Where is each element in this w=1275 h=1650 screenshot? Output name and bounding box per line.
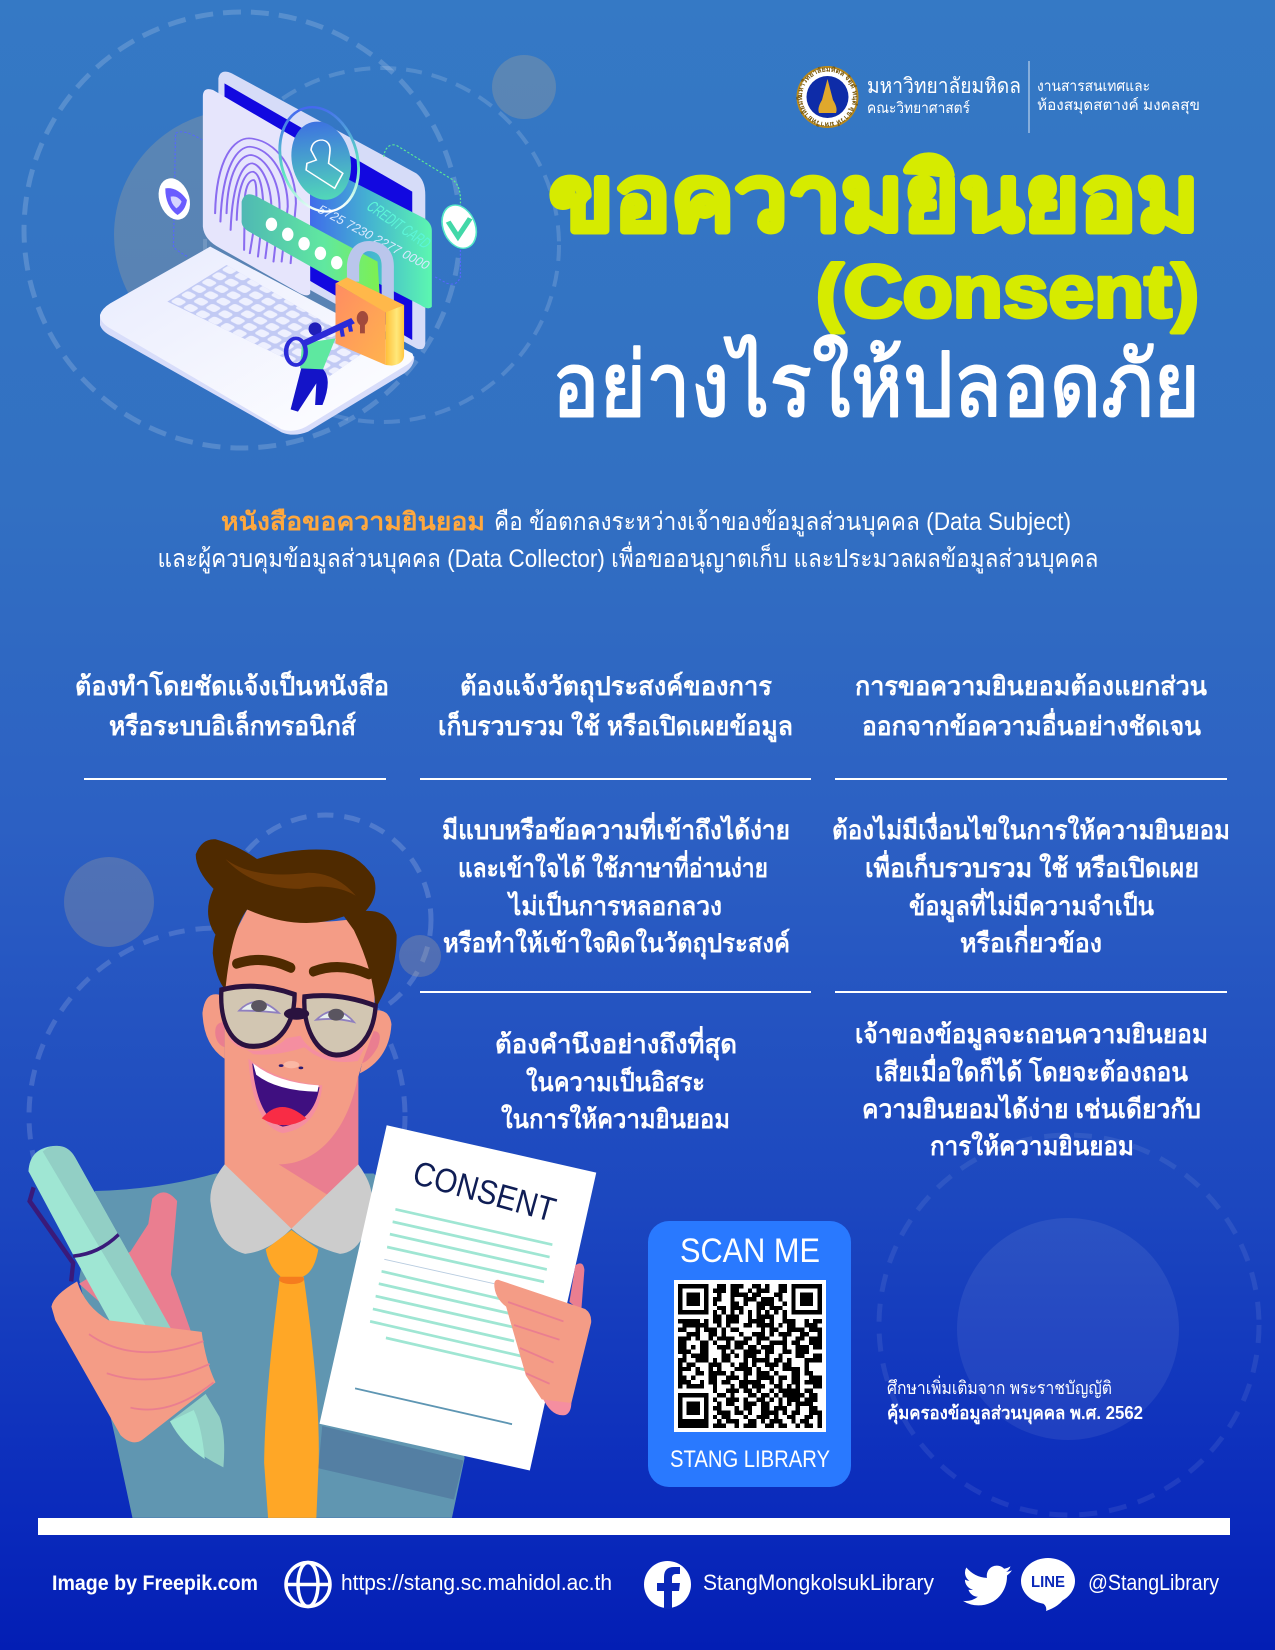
image credit: Image by Freepik.com bbox=[52, 1572, 258, 1595]
definition paragraph: หนังสือขอความยินยอม bbox=[221, 508, 485, 536]
item: freedom of consent: ต้องคำนึงอย่างถึงที่สุด bbox=[495, 1025, 737, 1061]
QR code bbox=[678, 1286, 822, 1426]
item: no unnecessary conditions bbox=[832, 811, 1230, 958]
faculty name: มหาวิทยาลัยมหิดล bbox=[867, 75, 1021, 98]
item: easy to access bbox=[442, 811, 790, 960]
item: state purpose: ต้องแจ้งวัตถุประสงค์ของการ bbox=[460, 671, 772, 703]
check badge bbox=[384, 145, 482, 284]
password bar bbox=[242, 194, 380, 293]
credit card: 5725 7230 2277 0000 bbox=[314, 203, 433, 272]
left thumb behind pen bbox=[79, 1192, 191, 1331]
item: freedom of consent: ในการให้ความยินยอม bbox=[501, 1104, 730, 1134]
laptop screen bbox=[218, 72, 425, 349]
item: withdrawal: เจ้าของข้อมูลจะถอนความยินยอม bbox=[855, 1019, 1208, 1051]
definition paragraph bbox=[158, 508, 1098, 574]
item: withdrawal: การให้ความยินยอม bbox=[930, 1131, 1134, 1161]
laptop base bbox=[100, 247, 414, 435]
item: withdrawal bbox=[855, 1019, 1208, 1161]
item: easy to access: ไม่เป็นการหลอกลวง bbox=[506, 890, 722, 921]
nose bbox=[279, 1061, 303, 1069]
item: written form bbox=[75, 670, 389, 741]
icon: line bbox=[1021, 1558, 1075, 1611]
definition paragraph: คือ ข้อตกลงระหว่างเจ้าของข้อมูลส่วนบุคคล (Data Subject) bbox=[494, 508, 1071, 537]
item: no unnecessary conditions: ต้องไม่มีเงื่อนไขในการให้ความยินยอม bbox=[832, 811, 1230, 845]
padlock bbox=[336, 246, 404, 366]
credit card bbox=[310, 160, 435, 308]
item: easy to access: มีแบบหรือข้อความที่เข้าถึงได้ง่าย bbox=[442, 811, 790, 845]
twitter and line handle: @StangLibrary bbox=[1088, 1570, 1219, 1595]
library name: ห้องสมุดสตางค์ มงคลสุข bbox=[1037, 97, 1200, 115]
stang library label: STANG LIBRARY bbox=[670, 1446, 830, 1473]
title: (Consent) bbox=[816, 250, 1199, 333]
logo: Mahidol University bbox=[796, 61, 1200, 133]
library name bbox=[1037, 78, 1200, 115]
item: state purpose bbox=[438, 671, 793, 743]
item: easy to access: หรือทำให้เข้าใจผิดในวัตถุประสงค์ bbox=[443, 928, 790, 960]
item: no unnecessary conditions: ข้อมูลที่ไม่มีความจำเป็น bbox=[909, 887, 1154, 923]
note: further reading: ศึกษาเพิ่มเติมจาก พระราชบัญญัติ bbox=[887, 1375, 1112, 1398]
item: state purpose: เก็บรวบรวม ใช้ หรือเปิดเผยข้อมูล bbox=[438, 710, 793, 743]
icon: line: LINE bbox=[1031, 1574, 1065, 1591]
glasses and eyes bbox=[221, 986, 376, 1062]
ears bbox=[202, 994, 391, 1073]
credit card: CREDIT CARD bbox=[362, 199, 435, 252]
item: written form: ต้องทำโดยชัดแจ้งเป็นหนังสือ bbox=[75, 670, 389, 701]
item: separate from other text: การขอความยินยอมต้องแยกส่วน bbox=[855, 671, 1207, 701]
white footer bar bbox=[38, 1518, 1230, 1535]
note: further reading bbox=[887, 1375, 1143, 1425]
faculty name: คณะวิทยาศาสตร์ bbox=[867, 100, 970, 117]
neck shadow bbox=[279, 1075, 358, 1196]
icon: facebook bbox=[644, 1561, 691, 1609]
item: withdrawal: ความยินยอมได้ง่าย เช่นเดียวกับ bbox=[862, 1093, 1201, 1124]
shirt shadow bbox=[318, 1426, 463, 1499]
consent form heading: CONSENT bbox=[409, 1154, 560, 1230]
item: written form: หรือระบบอิเล็กทรอนิกส์ bbox=[109, 710, 356, 741]
right hand bbox=[494, 1263, 591, 1415]
item: easy to access: และเข้าใจได้ ใช้ภาษาที่อ่านง่าย bbox=[458, 849, 768, 883]
note: further reading: คุ้มครองข้อมูลส่วนบุคคล พ.ศ. 2562 bbox=[887, 1403, 1143, 1425]
illustration: laptop with security icons bbox=[100, 72, 482, 435]
collar bbox=[210, 1164, 372, 1254]
item: separate from other text bbox=[855, 671, 1207, 741]
illustration: smiling man holding pen and consent form bbox=[28, 839, 596, 1518]
item: freedom of consent bbox=[495, 1025, 737, 1134]
person with key bbox=[286, 321, 353, 412]
item: no unnecessary conditions: หรือเกี่ยวข้อง bbox=[960, 924, 1102, 958]
icon: globe bbox=[286, 1562, 330, 1606]
facebook name: StangMongkolsukLibrary bbox=[703, 1570, 934, 1595]
glass fingerprint panel bbox=[203, 89, 310, 295]
tie bbox=[264, 1230, 319, 1518]
face and neck bbox=[225, 910, 376, 1229]
left hand bbox=[51, 1281, 215, 1442]
definition paragraph: และผู้ควบคุมข้อมูลส่วนบุคคล (Data Collector) เพื่อขออนุญาตเก็บ และประมวลผลข้อมูลส่วนบุคคล bbox=[158, 541, 1098, 574]
title: อย่างไรให้ปลอดภัย bbox=[552, 335, 1200, 436]
eyebrows bbox=[236, 960, 369, 974]
icon: twitter bbox=[963, 1566, 1012, 1605]
title bbox=[549, 148, 1200, 436]
hair bbox=[196, 839, 397, 1008]
item: freedom of consent: ในความเป็นอิสระ bbox=[526, 1066, 705, 1097]
shirt bbox=[79, 1174, 465, 1518]
pen bbox=[28, 1146, 224, 1467]
faculty name bbox=[867, 75, 1021, 117]
title: ขอความยินยอม bbox=[549, 148, 1199, 250]
consent form sheet bbox=[319, 1125, 596, 1471]
scan me label: SCAN ME bbox=[680, 1232, 820, 1270]
shield badge bbox=[154, 132, 202, 257]
divider lines bbox=[84, 778, 1227, 993]
QR card bbox=[648, 1221, 851, 1487]
mouth bbox=[248, 1059, 322, 1133]
item: withdrawal: เสียเมื่อใดก็ได้ โดยจะต้องถอน bbox=[875, 1053, 1188, 1087]
footer bbox=[52, 1558, 1219, 1611]
website url: https://stang.sc.mahidol.ac.th bbox=[341, 1570, 612, 1595]
library name: งานสารสนเทศและ bbox=[1037, 78, 1150, 95]
user profile circle bbox=[270, 102, 368, 217]
item: separate from other text: ออกจากข้อความอื่นอย่างชัดเจน bbox=[862, 707, 1201, 741]
item: no unnecessary conditions: เพื่อเก็บรวบรวม ใช้ หรือเปิดเผย bbox=[865, 849, 1199, 883]
seal bbox=[796, 66, 858, 128]
